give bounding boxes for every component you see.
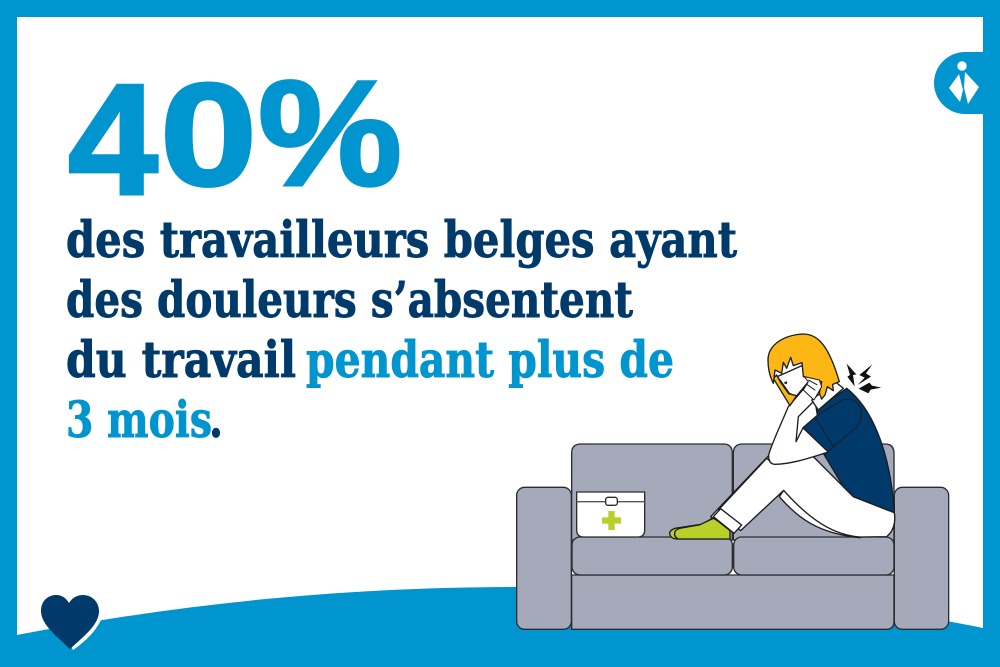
sofa base [572, 575, 894, 629]
line 4 full stop: . [209, 390, 223, 449]
neck [812, 382, 843, 410]
headline: 40%: 0 [160, 53, 257, 216]
line 3 highlighted part: pendant plus de [306, 330, 674, 389]
first aid kit [577, 492, 645, 537]
trousers [718, 455, 895, 537]
second forearm [796, 400, 817, 442]
illustration: person [670, 383, 895, 539]
eye [784, 381, 787, 384]
headline: 40%: % [258, 49, 402, 217]
shirt [802, 388, 894, 513]
line 4 highlighted part: 3 mois [66, 390, 212, 449]
shin back strip [711, 456, 773, 521]
face [777, 365, 808, 397]
sofa arm left [517, 487, 571, 629]
white strip under thigh [779, 490, 867, 538]
sofa arm right [894, 487, 949, 629]
front sock [675, 518, 730, 539]
rear sock [670, 517, 727, 539]
illustration: sofa [517, 444, 949, 629]
line 3 dark part: du travail [66, 330, 296, 389]
front hair lock [773, 375, 797, 406]
heart icon [41, 595, 102, 650]
headline: 40%: 4 [68, 52, 158, 228]
upper arm and forearm [769, 383, 828, 464]
sofa seat left [572, 537, 732, 575]
trouser cuff [713, 509, 742, 533]
line 2: des douleurs s’absentent [66, 270, 633, 329]
head [768, 334, 843, 410]
line 1: des travailleurs belges ayant [66, 210, 737, 269]
headline: 40% [68, 49, 402, 228]
body text [66, 210, 737, 449]
pain bolts [847, 364, 881, 393]
hair [768, 334, 839, 399]
blue wave at bottom [17, 587, 983, 667]
sofa back right [733, 444, 894, 540]
sofa back left [572, 444, 732, 540]
sleeve [802, 399, 861, 455]
sofa seat right [734, 537, 894, 575]
logo: blue tab with figure [934, 52, 983, 114]
hand [803, 377, 822, 400]
